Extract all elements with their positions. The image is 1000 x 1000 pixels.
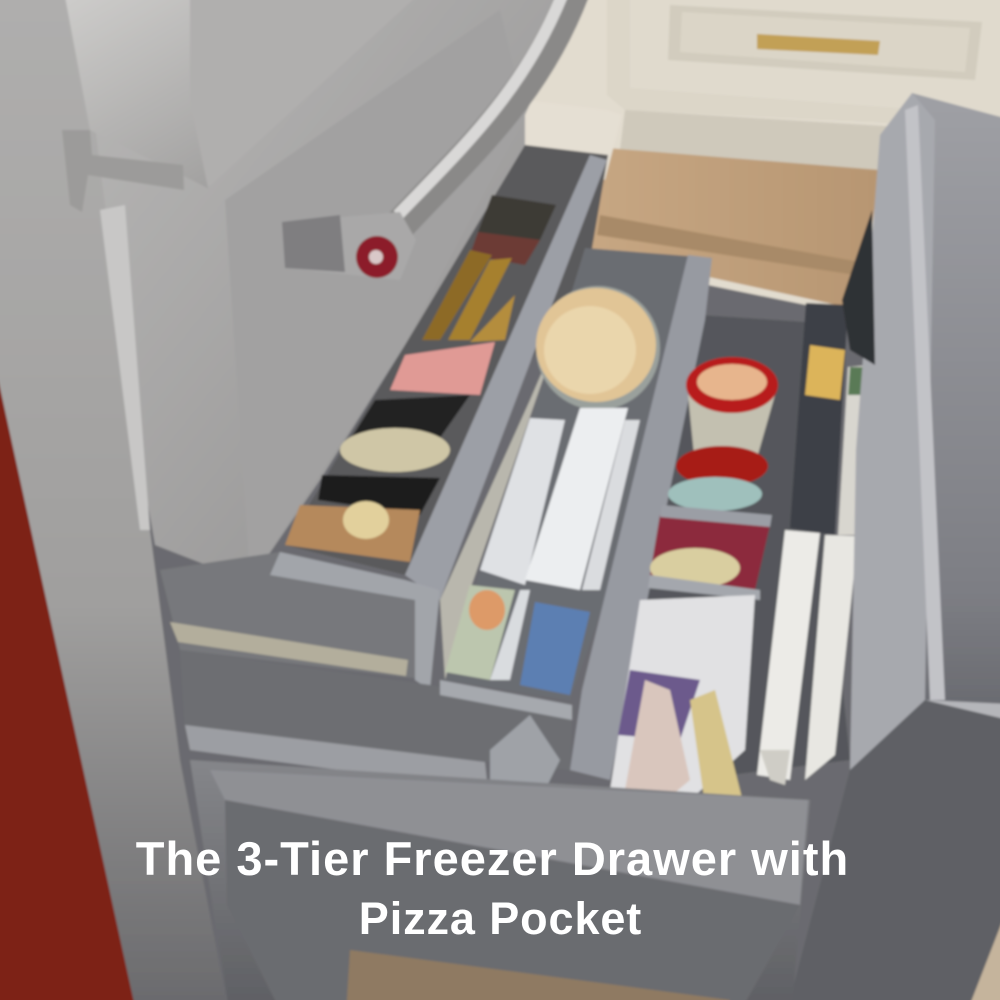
room background: cabinet and floor — [525, 0, 1000, 320]
drawer interior dark background — [285, 145, 608, 575]
small tray with red packets — [648, 505, 772, 600]
white wrapped packages — [480, 408, 640, 590]
left refrigerator side panel — [0, 0, 232, 1000]
back compartment — [610, 315, 850, 790]
title: Pizza Pocket — [359, 893, 642, 944]
stainless handle — [282, 0, 578, 280]
open drawer right door — [782, 93, 1000, 1000]
title — [136, 832, 849, 944]
drawer slide hardware — [160, 552, 572, 790]
pie crust — [536, 286, 660, 410]
lower white bags and pizza pocket food — [610, 595, 755, 810]
teal round container — [668, 477, 762, 511]
title: The 3-Tier Freezer Drawer with — [136, 832, 849, 885]
upper refrigerator door — [60, 0, 445, 212]
red wall at lower left — [0, 250, 140, 1000]
tall standing boxes behind — [790, 303, 870, 535]
middle tier interior — [445, 248, 712, 700]
frozen vegetable bags — [445, 585, 590, 695]
ice cream tub — [676, 357, 778, 486]
lower drawer front wall — [190, 760, 810, 1000]
freezer top drawer front — [95, 0, 590, 582]
clear divider and top tray rim — [405, 155, 607, 680]
pizza pocket boxes — [757, 530, 858, 785]
red badge on handle — [356, 236, 398, 278]
middle tray right rim — [570, 255, 712, 780]
top tier food items — [285, 195, 556, 562]
